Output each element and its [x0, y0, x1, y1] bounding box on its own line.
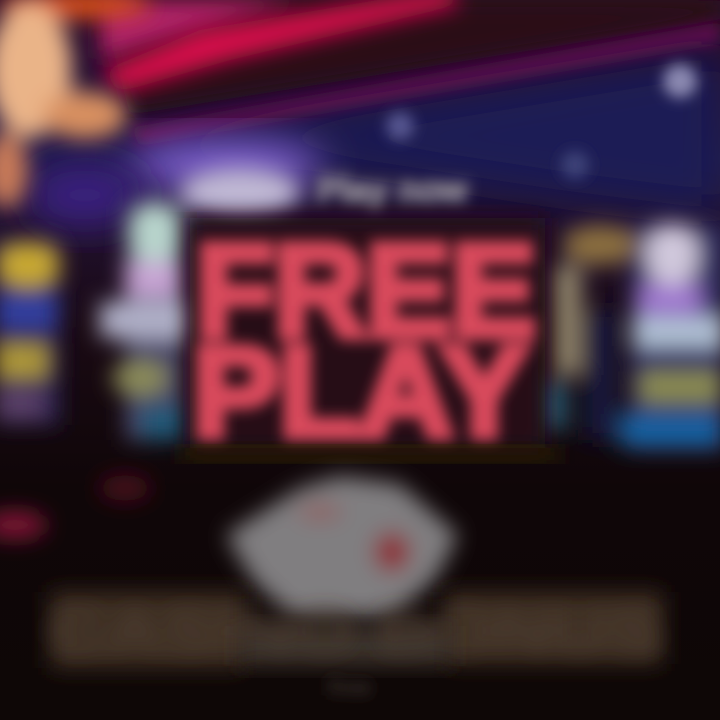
left slot machine [0, 240, 151, 539]
right slot machine [540, 223, 720, 450]
subtitle: Play now [317, 169, 468, 210]
title: FREE PLAY [192, 217, 536, 464]
stage rim under title [180, 448, 560, 460]
ceiling lights [386, 64, 697, 179]
footer note: free [328, 674, 372, 701]
lilac glow behind the title [125, 139, 325, 191]
bottom text band [50, 592, 663, 668]
title: FREE PLAY: FREE [196, 217, 536, 364]
title backing [190, 218, 545, 448]
chandelier [0, 0, 150, 208]
second left slot machine [100, 168, 300, 440]
title: FREE PLAY: PLAY [192, 321, 528, 464]
playing cards [226, 476, 458, 616]
bottom text band: CASINO BONUS [50, 599, 660, 662]
ceiling glow bands [100, 0, 720, 210]
